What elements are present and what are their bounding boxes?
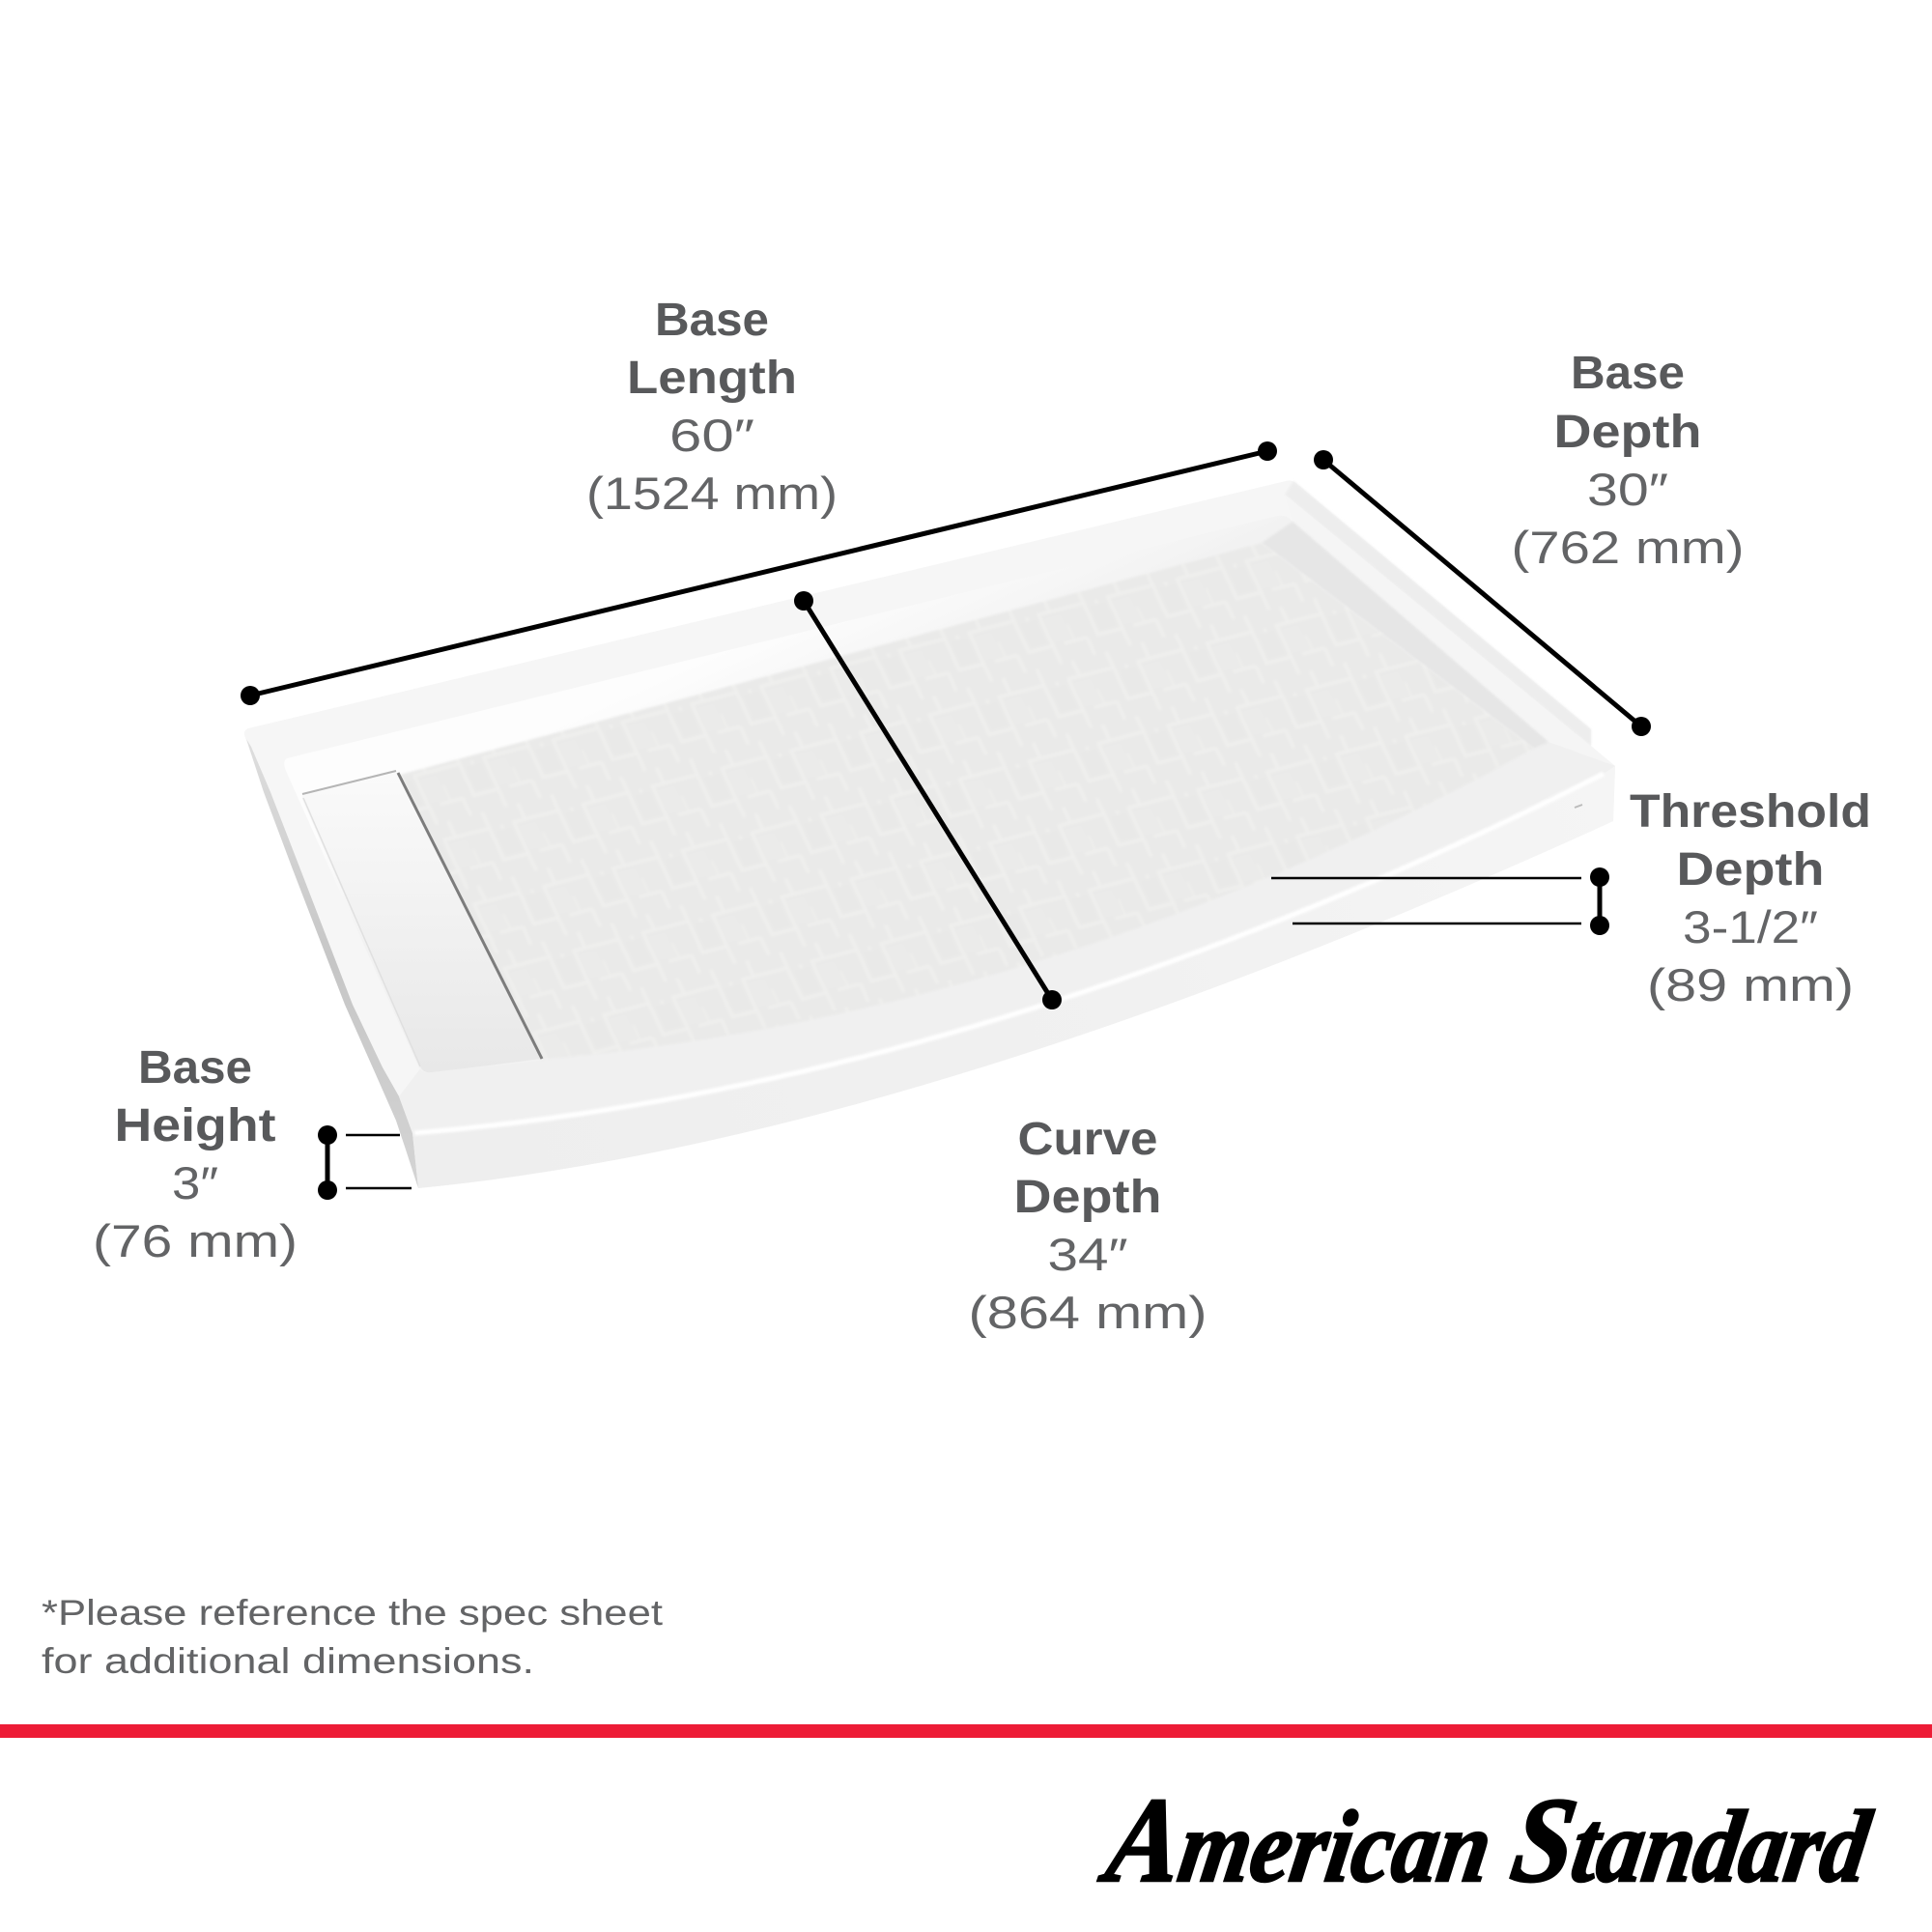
red divider bar [0,1724,1932,1738]
front rim surface [399,734,1615,1133]
right rim surface [1285,495,1615,766]
label: curve depth: Curve [1018,1114,1157,1165]
dimension marker: base height [318,1125,412,1200]
drain cover [302,772,541,1072]
drain gap lines [302,771,542,1066]
label: base height: (76 mm) [93,1215,298,1266]
label: curve depth: 34″ [1047,1229,1128,1280]
textured floor [400,543,1534,1060]
footnote [42,1593,664,1681]
basin wall [284,516,1548,1072]
label: base length: (1524 mm) [586,468,838,519]
footnote: for additional dimensions. [42,1641,534,1681]
label: threshold depth: (89 mm) [1647,959,1854,1010]
label: base depth [1511,348,1745,573]
label: base height: 3″ [172,1157,218,1208]
label: base depth: (762 mm) [1511,522,1745,573]
label: curve depth [968,1114,1208,1338]
label: base height [93,1042,298,1266]
label: threshold depth [1630,786,1871,1010]
front crease highlight [414,774,1604,1133]
label: threshold depth: Depth [1677,844,1824,895]
label: base depth: Depth [1553,407,1702,458]
label: threshold depth: 3-1/2″ [1683,901,1818,952]
footnote: *Please reference the spec sheet [42,1593,664,1633]
dimension line: base length [241,441,1277,705]
dimension marker: threshold depth [1271,867,1609,935]
dimension line: base depth [1314,450,1651,736]
label: base length: 60″ [669,410,754,461]
label: base depth: Base [1571,348,1685,399]
label: base length: Length [627,353,797,404]
logo: American Standard: American Standard [1093,1774,1881,1908]
back outer rim band [1285,481,1591,746]
shower base tray [244,481,1615,1188]
label: base height: Base [138,1042,252,1094]
label: curve depth: Depth [1014,1172,1161,1223]
label: base length: Base [655,295,769,346]
label: base height: Height [114,1100,276,1151]
label: base length [586,295,838,519]
front lower face [412,766,1615,1188]
right basin wall shadow [1262,522,1548,749]
label: curve depth: (864 mm) [968,1287,1208,1338]
threshold mark [1575,805,1582,808]
left side face [246,739,418,1188]
label: threshold depth: Threshold [1630,786,1871,838]
dimension line: curve depth [794,591,1062,1009]
label: base depth: 30″ [1587,464,1668,515]
tray silhouette and top rim [244,481,1615,1188]
